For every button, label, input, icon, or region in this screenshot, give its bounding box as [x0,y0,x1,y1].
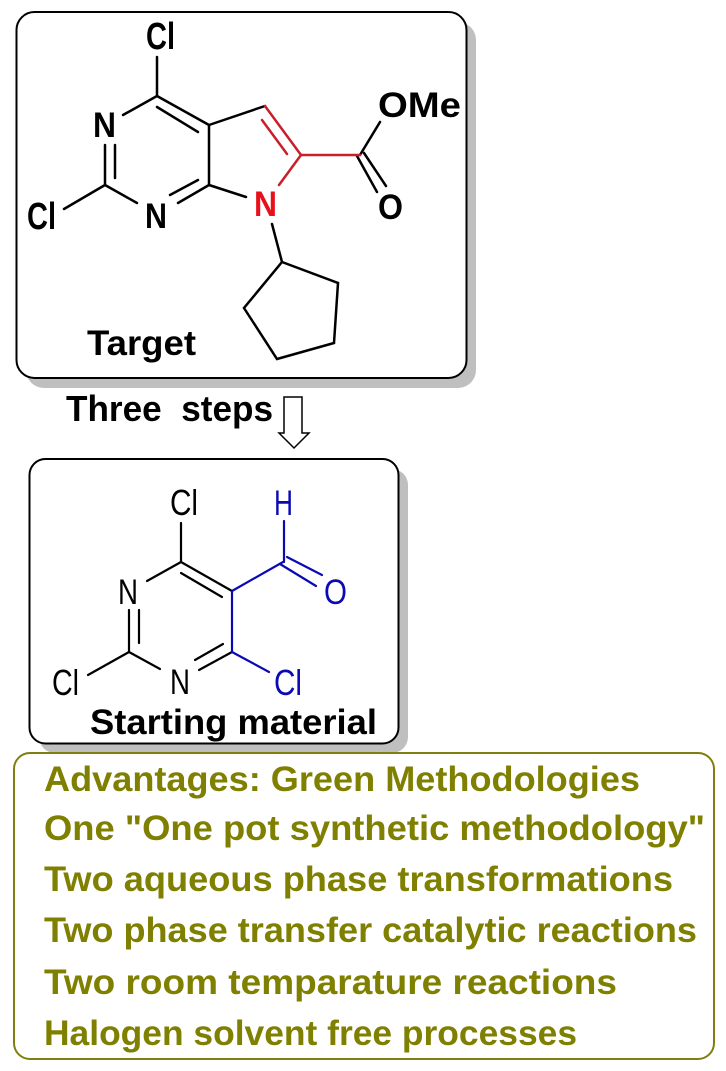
molecule: starting material structure: O [324,573,347,612]
text: phase transfer: Two phase transfer catalytic reactions [44,911,697,950]
molecule: starting material structure: H [274,484,293,523]
molecule: target structure [27,16,461,359]
panel: advantages [14,753,714,1059]
text: aqueous phase: Two aqueous phase transformations [44,860,673,899]
text: advantages heading: Advantages: Green Methodologies [44,760,640,799]
molecule: target structure: N [254,185,277,224]
molecule: target structure: Cl [27,196,56,238]
label: target: Target [87,324,196,363]
arrow: retrosynthesis [279,397,309,448]
text: one pot: One "One pot synthetic methodology" [44,809,705,848]
molecule: target structure: N [93,106,116,145]
molecule: starting material structure: N [170,663,190,702]
molecule: target structure: Cl [146,16,175,58]
molecule: starting material structure [52,482,347,703]
molecule: starting material structure: Cl [52,662,79,703]
molecule: starting material structure: Cl [274,662,302,703]
molecule: target structure: N [145,197,167,236]
panel: starting material [30,459,408,753]
label: starting material: Starting material [90,703,377,742]
text: room temperature: Two room temparature reactions [44,963,617,1002]
molecule: starting material structure: N [118,573,138,612]
text: halogen free: Halogen solvent free processes [44,1014,577,1053]
panel: target [16,12,476,388]
molecule: starting material structure: Cl [170,482,198,523]
molecule: target structure: O [378,188,403,227]
label: three steps: Three steps [66,388,273,429]
molecule: target structure: OMe [378,86,461,125]
